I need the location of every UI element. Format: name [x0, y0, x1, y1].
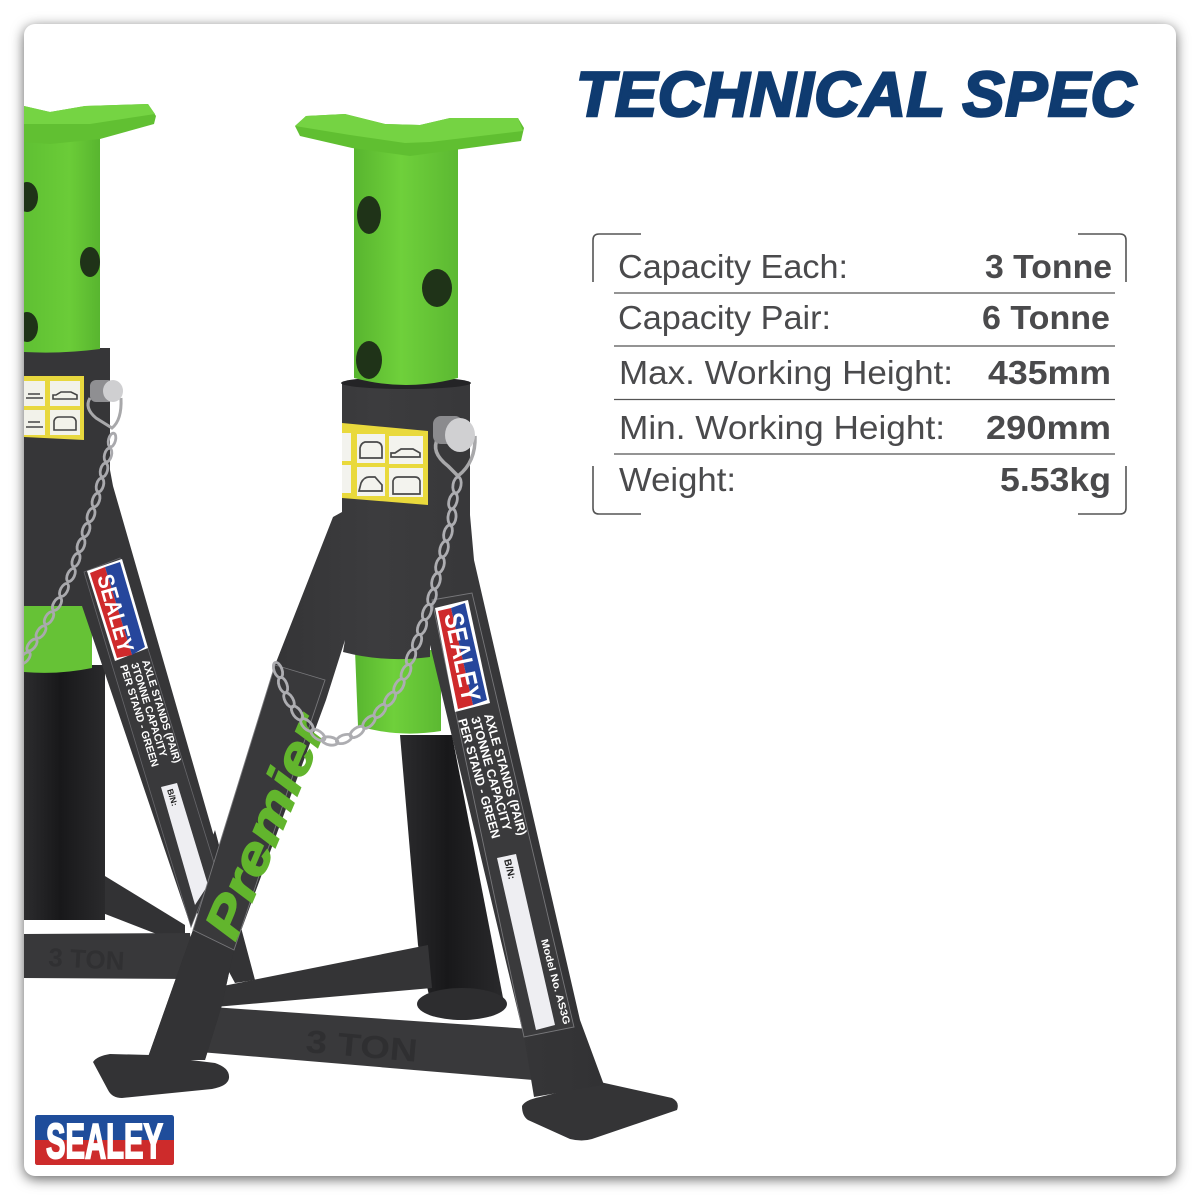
- row: max working height: Max. Working Height:: [619, 354, 953, 391]
- row dividers: [614, 293, 1115, 454]
- left stand chain: [18, 432, 117, 666]
- row: capacity pair: Capacity Pair:: [618, 299, 831, 336]
- left stand leg text: AXLE STANDS (PAIR): [139, 658, 183, 764]
- Sealey logo: SEALEY: [46, 1115, 163, 1169]
- front stand lower green sleeve: [355, 650, 441, 734]
- row: capacity pair: [618, 299, 1110, 336]
- row: min working height: Min. Working Height:: [619, 409, 945, 446]
- Premier leg label: Premier: [194, 705, 338, 946]
- row: weight: 5.53kg: [1000, 461, 1111, 498]
- right leg Sealey badge: SEALEY: [438, 610, 486, 704]
- chain: [272, 476, 462, 746]
- front stand right foot: [522, 1082, 678, 1140]
- front axle stand: [93, 114, 678, 1140]
- warning sticker: [342, 423, 428, 505]
- left stand batch number strip: [161, 783, 208, 905]
- batch number strip: [497, 854, 555, 1030]
- pin and ring: [433, 416, 475, 476]
- left stand tube holes: [16, 182, 100, 342]
- model number text: Model No. AS3G: [538, 938, 572, 1026]
- table corner brackets: [593, 234, 1126, 514]
- row: weight: [619, 461, 1111, 498]
- front stand rear base bar: [215, 945, 432, 1007]
- title: TECHNICAL SPEC: [576, 60, 1138, 130]
- left stand base: 3 TON: [48, 942, 125, 976]
- left stand upper green tube: [24, 130, 100, 353]
- left stand leg text: [120, 661, 181, 767]
- left stand base: [24, 830, 255, 983]
- row: min working height: [619, 409, 1111, 446]
- spec table: [593, 234, 1126, 514]
- right leg product text: PER STAND - GREEN: [455, 717, 503, 840]
- left stand leg text: 3TONNE CAPACITY: [128, 661, 169, 759]
- row: weight: Weight:: [619, 461, 736, 498]
- row: capacity each: 3 Tonne: [985, 248, 1112, 285]
- front stand upper green tube: [354, 140, 458, 385]
- front stand main base bar: [200, 1007, 545, 1081]
- row: max working height: 435mm: [988, 354, 1111, 391]
- front stand saddle: [295, 114, 524, 156]
- front stand collar with legs: [147, 382, 604, 1097]
- right leg product text: 3TONNE CAPACITY: [468, 715, 514, 833]
- left stand saddle: [24, 104, 156, 144]
- left stand post: [24, 665, 105, 920]
- Sealey logo: [35, 1115, 174, 1169]
- row: capacity each: [618, 248, 1112, 285]
- left stand Sealey badge: SEALEY: [92, 571, 139, 655]
- left stand dark label on leg: [84, 558, 215, 927]
- left stand Sealey badge: [87, 559, 148, 661]
- left stand warning sticker: [24, 376, 84, 440]
- front stand post flange: [417, 988, 507, 1020]
- embossed 3 TON mark: 3 TON: [304, 1023, 419, 1069]
- Premier leg label: [193, 665, 338, 950]
- right leg dark label: [432, 593, 574, 1037]
- left stand leg text: PER STAND - GREEN: [117, 663, 161, 769]
- leg shading: [147, 930, 234, 1060]
- tube holes: [356, 196, 452, 379]
- front stand left foot: [93, 1054, 229, 1098]
- batch number strip: B/N:: [501, 858, 517, 881]
- left stand batch number strip: B/N:: [165, 788, 180, 807]
- row: capacity each: Capacity Each:: [618, 248, 848, 285]
- row: min working height: 290mm: [986, 409, 1111, 446]
- collar rim: [341, 377, 471, 389]
- left stand pin and ring: [88, 380, 123, 428]
- front stand rear post: [400, 735, 505, 1008]
- left stand lower green sleeve: [24, 600, 92, 673]
- left axle stand: [16, 104, 255, 983]
- left stand collar and leg: [24, 348, 217, 927]
- right leg product text: [455, 712, 529, 840]
- row: capacity pair: 6 Tonne: [982, 299, 1110, 336]
- right leg product text: AXLE STANDS (PAIR): [481, 712, 529, 837]
- row: max working height: [619, 354, 1111, 391]
